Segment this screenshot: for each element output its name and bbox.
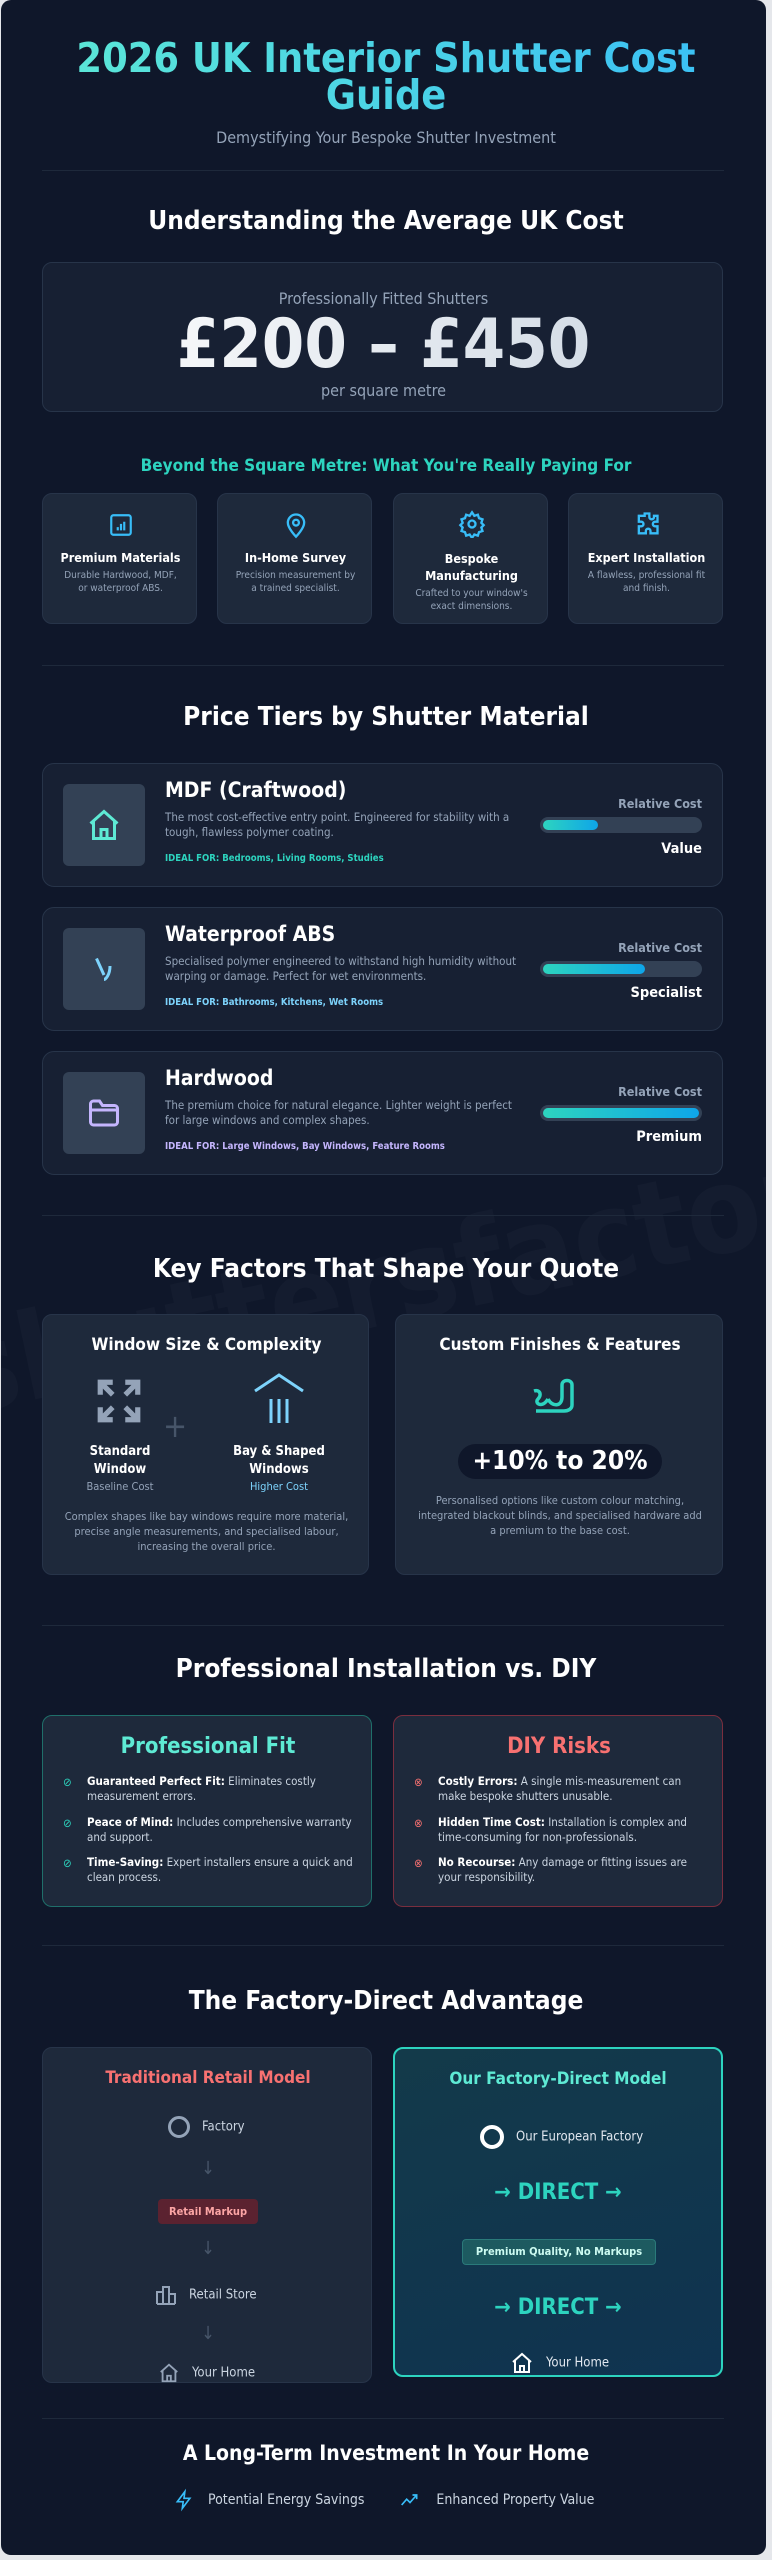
icon: brush — [534, 1378, 574, 1413]
item: ⊗ — [414, 1856, 423, 1870]
card: installation — [568, 493, 723, 624]
icon: chart — [110, 514, 132, 536]
panel: window size: Standard Window — [90, 1444, 150, 1477]
heading: factory direct: The Factory-Direct Advantage — [189, 1986, 583, 2016]
your home: Your Home — [192, 2366, 255, 2380]
panel: factory direct: Our Factory-Direct Model — [449, 2069, 667, 2089]
title: 2026 UK Interior Shutter Cost — [76, 34, 696, 82]
icon: expand — [98, 1380, 140, 1422]
panel: window size: Window Size & Complexity — [91, 1335, 322, 1355]
card: bespoke: exact dimensions. — [431, 601, 512, 612]
card: premium materials — [42, 493, 197, 624]
pill: percentage: +10% to 20% — [472, 1446, 648, 1476]
card: installation: A flawless, professional fit — [588, 570, 705, 581]
panel: professional fit — [42, 1715, 372, 1907]
icon: bolt — [176, 2488, 192, 2512]
heading: key factors: Key Factors That Shape Your Quote — [153, 1254, 619, 1284]
panel: window size: Complex shapes like bay windows require more material, precise angle measurements, and specialised labour, increasing the overall price. — [65, 1510, 348, 1553]
icon: gear — [458, 510, 486, 538]
icon: plus: + — [163, 1407, 187, 1445]
title: Guide — [326, 71, 446, 119]
item: Peace of Mind: Includes comprehensive warranty and support. — [87, 1815, 352, 1844]
icon: house — [63, 784, 145, 866]
panel: custom finishes: Custom Finishes & Features — [439, 1335, 681, 1355]
retail store — [156, 2286, 257, 2305]
tier: hardwood: The premium choice for natural elegance. Lighter weight is perfect for large windows and complex shapes. — [165, 1098, 512, 1127]
pill — [462, 2239, 656, 2265]
panel: DIY risks: DIY Risks — [507, 1734, 611, 1759]
factory — [168, 2116, 245, 2138]
panel: custom finishes — [395, 1314, 723, 1575]
icon: folder — [63, 1072, 145, 1154]
panel: window size: Higher Cost — [250, 1480, 308, 1493]
price — [43, 305, 724, 384]
item: ⊘ — [63, 1856, 72, 1870]
tier: ABS: Specialist — [630, 985, 702, 1001]
benefits row: Potential Energy Savings Enhanced Property Value — [208, 2492, 594, 2508]
factory: Factory — [202, 2120, 245, 2134]
direct arrow: → DIRECT → — [494, 2180, 622, 2205]
tier: MDF: MDF (Craftwood) — [165, 778, 346, 802]
tier: MDF: The most cost-effective entry point. Engineered for stability with a tough, flawless polymer coating. — [165, 810, 509, 839]
panel: traditional retail: ↓ — [201, 2238, 215, 2259]
item: Hidden Time Cost: Installation is complex and time-consuming for non-professionals. — [438, 1815, 687, 1844]
icon: puzzle — [638, 512, 659, 534]
icon: bay — [254, 1373, 304, 1423]
tier: ABS: Relative Cost — [618, 940, 702, 955]
panel: window size: Baseline Cost — [86, 1480, 154, 1493]
tier: ABS: Specialised polymer engineered to withstand high humidity without warping or damage. Perfect for wet environments. — [165, 954, 516, 983]
markup pill — [158, 2199, 258, 2224]
panel: traditional retail: ↓ — [201, 2158, 215, 2179]
heading: long-term: A Long-Term Investment In Your Home — [183, 2441, 589, 2465]
price: £200 – £450 — [177, 305, 590, 384]
icon: pin — [286, 513, 306, 538]
card: survey: a trained specialist. — [251, 583, 340, 594]
tier: hardwood: IDEAL FOR: Large Windows, Bay Windows, Feature Rooms — [165, 1141, 445, 1152]
item: ⊘ — [63, 1816, 72, 1830]
subheading: beyond: Beyond the Square Metre: What You're Really Paying For — [141, 456, 631, 476]
item: ⊗ — [414, 1816, 423, 1830]
card: bespoke — [393, 493, 548, 624]
retail store: Retail Store — [189, 2288, 257, 2302]
panel: factory direct — [393, 2047, 723, 2377]
tier: hardwood: Premium — [636, 1129, 702, 1145]
card: installation: Expert Installation — [588, 550, 705, 565]
panel: professional fit: Professional Fit — [121, 1734, 295, 1759]
panel: custom finishes: Personalised options like custom colour matching, integrated blackout blinds, and specialised hardware add a premium to the base cost. — [418, 1494, 702, 1537]
item: Time-Saving: Expert installers ensure a quick and clean process. — [87, 1855, 353, 1884]
panel: DIY risks — [393, 1715, 723, 1907]
tier: ABS: IDEAL FOR: Bathrooms, Kitchens, Wet Rooms — [165, 997, 383, 1008]
card: survey: Precision measurement by — [236, 570, 355, 581]
item: No Recourse: Any damage or fitting issues are your responsibility. — [438, 1855, 687, 1884]
tier: hardwood — [42, 1051, 723, 1175]
card: installation: and finish. — [623, 583, 670, 594]
tier: ABS — [42, 907, 723, 1031]
item: ⊗ — [414, 1775, 423, 1789]
icon: drop — [63, 928, 145, 1010]
item: ⊘ — [63, 1775, 72, 1789]
markup pill: Retail Markup — [169, 2205, 247, 2218]
tier: hardwood: Relative Cost — [618, 1084, 702, 1099]
item: Guaranteed Perfect Fit: Eliminates costly measurement errors. — [87, 1774, 316, 1803]
tier: hardwood: Hardwood — [165, 1066, 273, 1090]
card: bespoke: Manufacturing — [425, 568, 518, 583]
heading: pro vs DIY: Professional Installation vs. DIY — [176, 1654, 596, 1684]
item: Costly Errors: A single mis-measurement can make bespoke shutters unusable. — [438, 1774, 681, 1803]
tier: MDF: Value — [661, 841, 702, 857]
label: Professionally Fitted Shutters — [279, 289, 488, 308]
panel: window size — [42, 1314, 369, 1575]
panel: traditional retail: Traditional Retail Model — [105, 2068, 311, 2088]
heading: average cost: Understanding the Average UK Cost — [148, 206, 624, 236]
benefits row — [176, 2488, 594, 2512]
direct arrow: → DIRECT → — [494, 2295, 622, 2320]
card: survey: In-Home Survey — [245, 550, 346, 565]
card: bespoke: Bespoke — [445, 551, 498, 566]
subtitle: Demystifying Your Bespoke Shutter Investment — [216, 128, 556, 147]
panel: price range — [42, 262, 723, 412]
factory: Our European Factory — [516, 2130, 643, 2144]
tier: MDF: IDEAL FOR: Bedrooms, Living Rooms, Studies — [165, 853, 384, 864]
card: survey — [217, 493, 372, 624]
your home — [160, 2364, 255, 2382]
unit: per square metre — [321, 381, 446, 400]
your home: Your Home — [546, 2356, 609, 2370]
tier: ABS: Waterproof ABS — [165, 922, 335, 946]
title — [0, 40, 772, 114]
card: bespoke: Crafted to your window's — [415, 588, 528, 599]
tier: MDF — [42, 763, 723, 887]
factory — [480, 2125, 643, 2149]
your home — [512, 2352, 609, 2373]
heading: price tiers: Price Tiers by Shutter Material — [183, 702, 589, 732]
icon: trend — [401, 2494, 418, 2506]
panel: window size: Bay & Shaped Windows — [233, 1444, 325, 1477]
panel: traditional retail: ↓ — [201, 2323, 215, 2344]
card: premium materials: or waterproof ABS. — [78, 583, 163, 594]
tier: MDF: Relative Cost — [618, 796, 702, 811]
card: premium materials: Premium Materials — [61, 550, 180, 565]
card: premium materials: Durable Hardwood, MDF, — [64, 570, 177, 581]
pill: Premium Quality, No Markups — [476, 2245, 642, 2258]
panel: traditional retail — [42, 2047, 372, 2383]
